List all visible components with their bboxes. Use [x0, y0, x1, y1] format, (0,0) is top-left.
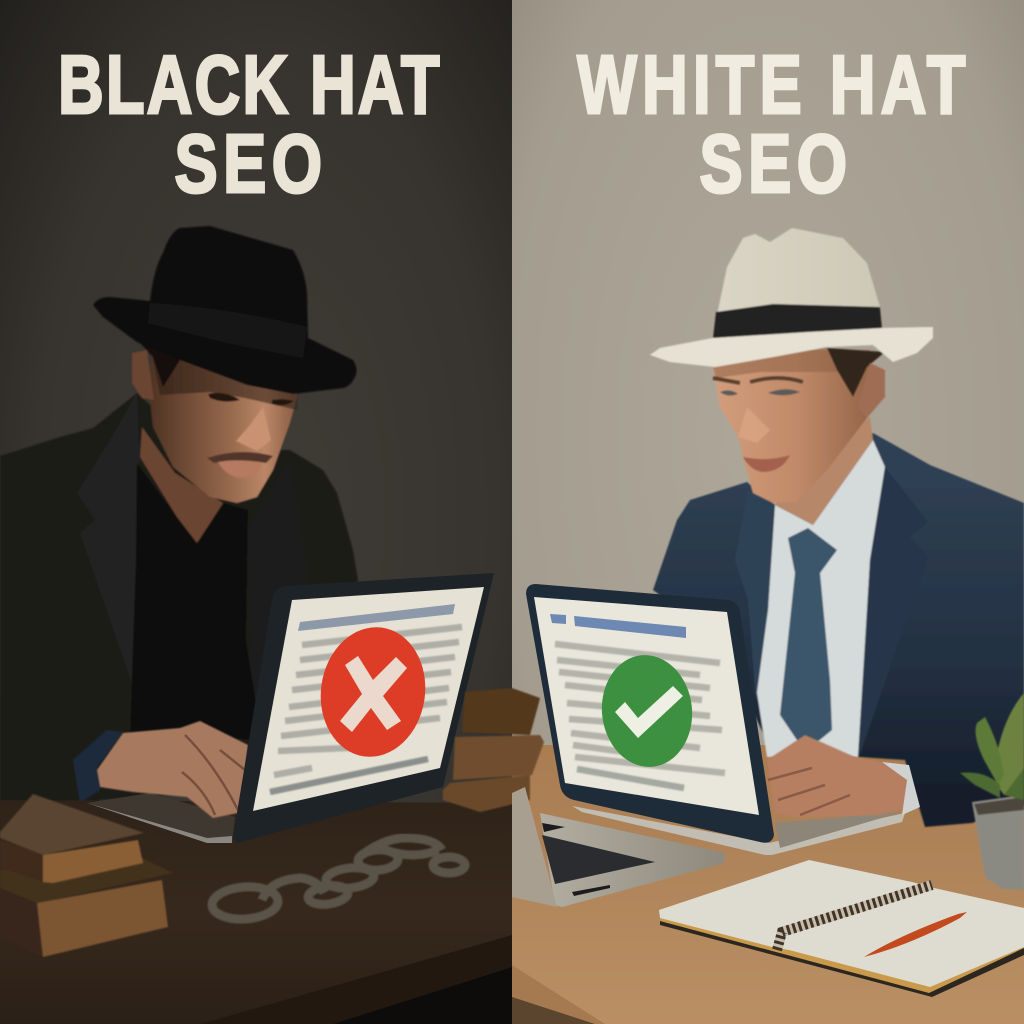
hand — [97, 721, 248, 818]
moustache — [207, 452, 273, 463]
desk — [512, 745, 1024, 1024]
hat shadow on forehead — [713, 347, 845, 378]
shirt — [130, 463, 262, 740]
hat — [650, 228, 933, 367]
right lapel — [859, 467, 928, 757]
laptop base — [572, 806, 905, 855]
panel: white hat — [443, 0, 1024, 1024]
neck — [775, 417, 873, 525]
laptop: rejected page — [87, 573, 494, 843]
icon: potted plant — [960, 693, 1024, 890]
icon: notebook and red pen — [659, 860, 1024, 997]
hair — [140, 343, 180, 387]
title: white hat seo: SEO — [699, 117, 853, 210]
hand — [767, 735, 907, 817]
page text lines — [555, 644, 725, 788]
laptop: keyboard laptop — [512, 787, 725, 907]
jacket — [653, 433, 1024, 827]
cuff — [882, 762, 920, 815]
figure: man in navy suit — [650, 228, 1024, 827]
left lapel — [735, 490, 773, 700]
shadow under hat brim — [150, 345, 298, 410]
icon: green check — [596, 651, 698, 771]
panel: black hat — [0, 0, 512, 1024]
nose — [738, 407, 770, 443]
face — [150, 345, 297, 503]
spiral binding — [777, 885, 932, 950]
page text lines — [270, 627, 462, 792]
face — [713, 350, 870, 503]
laptop screen — [253, 587, 484, 811]
title: white hat seo — [577, 38, 971, 210]
desk — [0, 800, 512, 1024]
laptop base — [87, 793, 235, 843]
laptop: approved page — [526, 584, 920, 855]
pen — [864, 912, 967, 957]
title: black hat seo — [58, 38, 442, 210]
icon: stacked old books left — [0, 794, 173, 957]
title: white hat seo: WHITE HAT — [577, 38, 971, 131]
shirt — [755, 440, 885, 757]
tie — [780, 528, 837, 752]
hair — [827, 348, 885, 397]
eyes — [208, 393, 294, 405]
laptop lid — [233, 573, 494, 843]
nose — [236, 407, 271, 451]
page header — [550, 614, 686, 638]
title: black hat seo: SEO — [174, 117, 328, 210]
lips — [218, 460, 262, 478]
figure: man in black suit — [0, 226, 358, 808]
jacket — [0, 393, 358, 808]
icon: red x — [312, 620, 434, 764]
laptop lid — [526, 584, 774, 843]
neck — [140, 427, 223, 543]
ear — [132, 350, 154, 400]
icon: stacked old books right — [443, 688, 544, 812]
page header — [298, 604, 455, 631]
brows and eyes — [713, 378, 803, 383]
hat — [93, 226, 357, 394]
title: black hat seo: BLACK HAT — [58, 38, 442, 131]
cuff — [73, 730, 123, 803]
ear — [858, 363, 885, 418]
laptop screen — [534, 597, 759, 815]
mouth — [743, 455, 790, 472]
icon: chain — [211, 838, 465, 921]
